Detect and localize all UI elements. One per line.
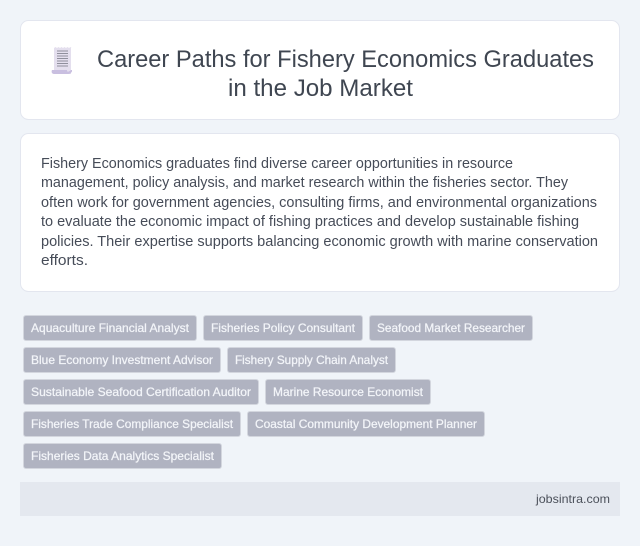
tag: Blue Economy Investment Advisor (24, 348, 220, 372)
description text: policies. Their expertise supports balancing economic growth with marine conservation (41, 234, 598, 250)
icon: paper receipt (52, 47, 72, 74)
description text: Fishery Economics graduates find diverse career opportunities in resource (41, 156, 513, 172)
panel: title header (20, 20, 620, 120)
tag: Fisheries Data Analytics Specialist (24, 444, 222, 468)
description text: efforts. (41, 253, 88, 269)
tag: Fishery Supply Chain Analyst (228, 348, 396, 372)
tag: Fisheries Policy Consultant (204, 316, 362, 340)
tag: Marine Resource Economist (266, 380, 430, 404)
tag: Aquaculture Financial Analyst: Aquaculture Financial Analyst (31, 321, 190, 335)
tag: Aquaculture Financial Analyst (24, 316, 196, 340)
description text: management, policy analysis, and market research within the fisheries sector. They (41, 175, 569, 191)
tag: Fisheries Policy Consultant: Fisheries Policy Consultant (211, 321, 356, 335)
footer bar (20, 482, 620, 516)
description text (41, 156, 598, 269)
tag: Fisheries Trade Compliance Specialist: Fisheries Trade Compliance Specialist (31, 417, 234, 431)
tag list (24, 316, 532, 468)
tag: Blue Economy Investment Advisor: Blue Economy Investment Advisor (31, 353, 213, 367)
title text: in the Job Market (228, 75, 413, 102)
title text: Career Paths for Fishery Economics Graduates (97, 46, 594, 73)
tag: Fishery Supply Chain Analyst: Fishery Supply Chain Analyst (235, 353, 389, 367)
title text (97, 46, 594, 102)
tag: Seafood Market Researcher (370, 316, 532, 340)
tag: Sustainable Seafood Certification Auditor (24, 380, 258, 404)
footer source text: jobsintra.com (535, 492, 610, 506)
tag: Seafood Market Researcher: Seafood Market Researcher (377, 321, 525, 335)
tag: Coastal Community Development Planner: Coastal Community Development Planner (255, 417, 477, 431)
tag: Coastal Community Development Planner (248, 412, 484, 436)
panel: description (20, 134, 620, 292)
description text: often work for government agencies, consulting firms, and environmental organizations (41, 195, 597, 211)
description text: to evaluate the economic impact of fishing practices and develop sustainable fishing (41, 214, 579, 230)
tag: Fisheries Trade Compliance Specialist (24, 412, 240, 436)
tag: Marine Resource Economist: Marine Resource Economist (273, 385, 424, 399)
tag: Sustainable Seafood Certification Auditor: Sustainable Seafood Certification Auditor (31, 385, 251, 399)
tag: Fisheries Data Analytics Specialist: Fisheries Data Analytics Specialist (31, 449, 215, 463)
